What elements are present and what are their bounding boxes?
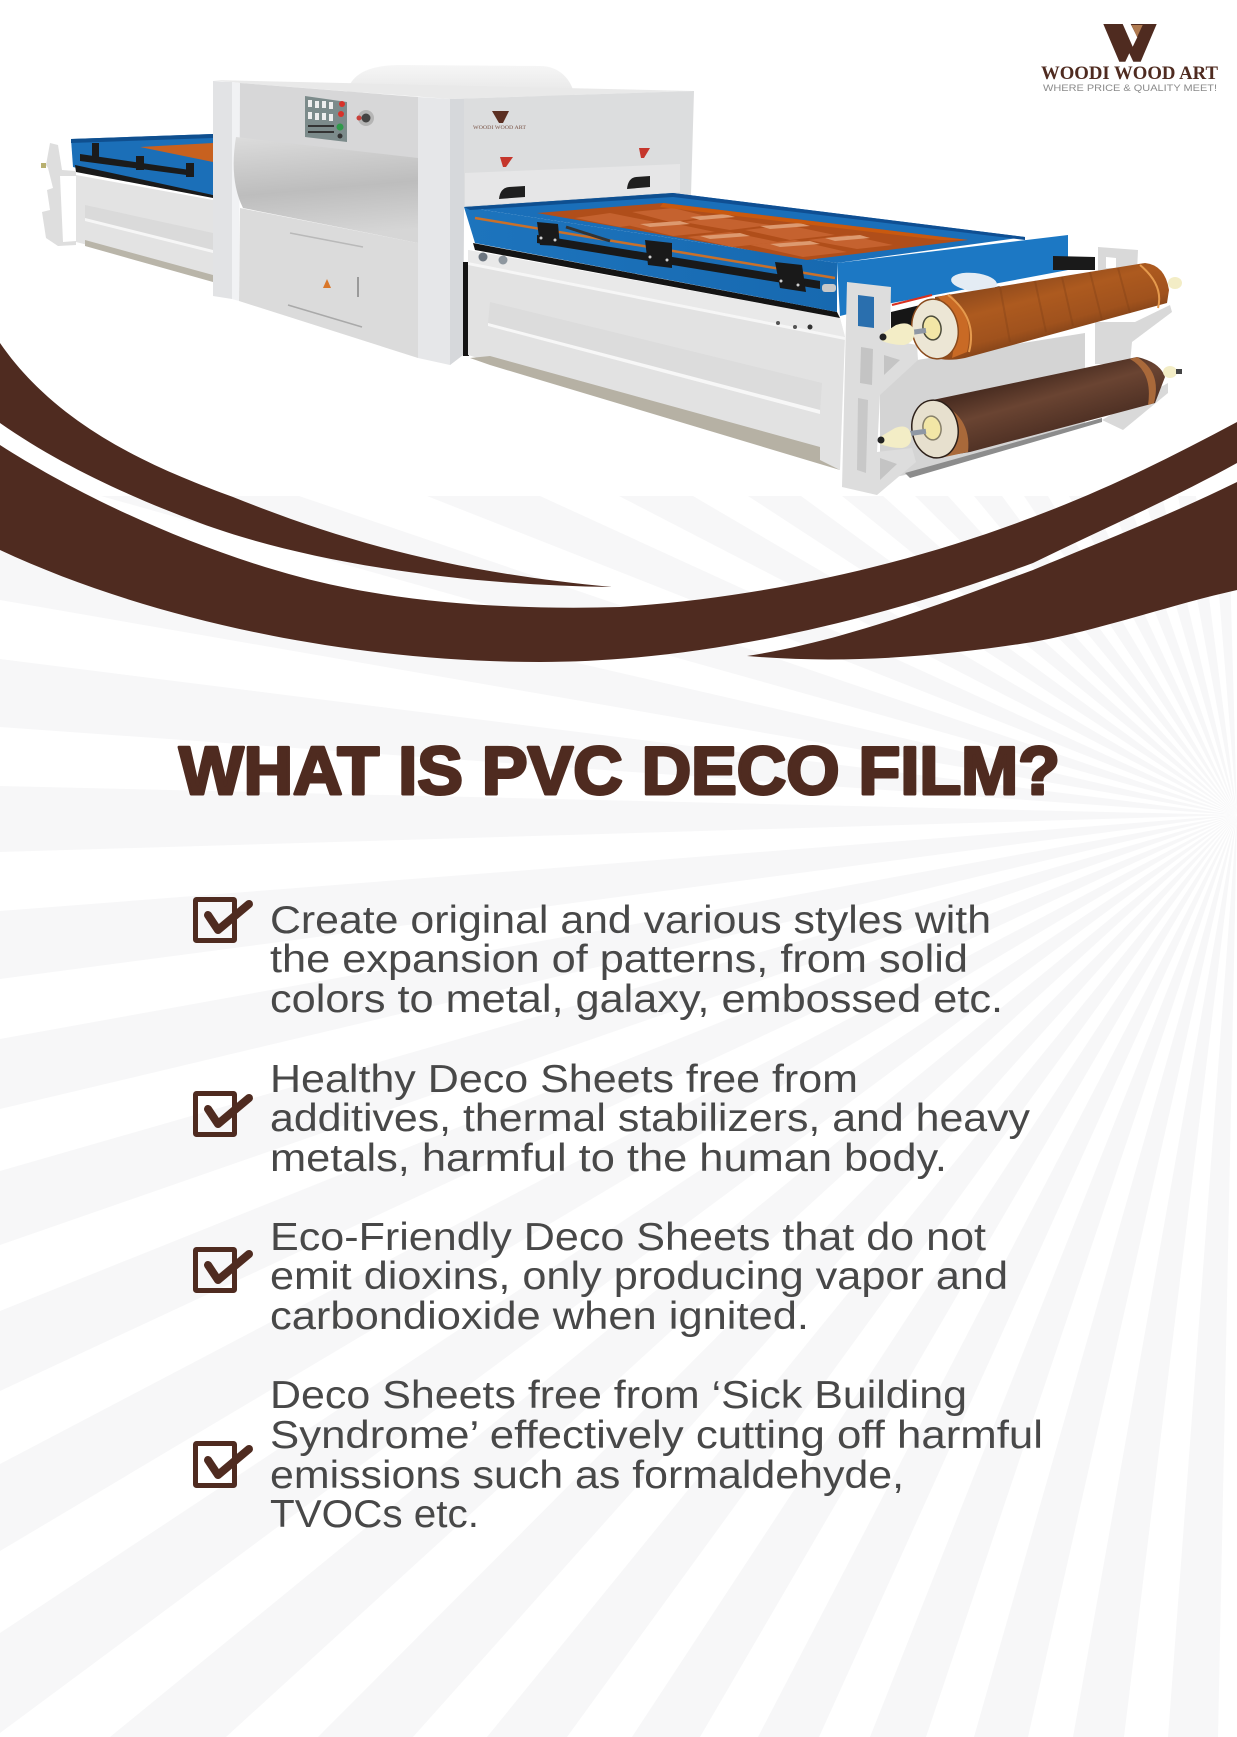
text block: Deco Sheets free from ‘Sick Building [270,1374,967,1417]
text block [270,899,1003,1021]
selector knob [356,110,374,126]
icon: checkbox [196,1250,249,1290]
film bed [537,203,968,260]
text block: Create original and various styles with [270,899,991,942]
text block: colors to metal, galaxy, embossed etc. [270,978,1003,1021]
top dome [347,65,575,97]
logo tagline: WHERE PRICE & QUALITY MEET! [1043,83,1217,93]
right blue table with film bed [464,193,1068,318]
upper left swoosh [0,343,612,587]
machine logo: WOODI WOOD ART [473,126,526,131]
pump motor [950,271,998,293]
text block: TVOCs etc. [270,1493,479,1536]
logo mark [1103,24,1157,62]
text block: emit dioxins, only producing vapor and [270,1255,1008,1298]
right lower body [463,250,845,470]
left table [41,134,213,282]
text block: Eco-Friendly Deco Sheets that do not [270,1216,986,1259]
title: WHAT IS PVC DECO FILM? [179,733,1060,809]
text block: carbondioxide when ignited. [270,1295,809,1338]
text block [270,1216,1008,1338]
machine logo [473,111,526,131]
air cylinder [1053,256,1095,270]
bullet 2 [196,1058,1031,1180]
central cabinet [213,65,694,365]
logo wordmark: WOODI WOOD ART [1041,63,1218,84]
bullet 4 [196,1374,1043,1536]
back bracket [1095,247,1172,430]
logo [1041,24,1218,93]
back wall behind rollers [880,333,1085,480]
black gap and wire [891,286,1000,340]
text block: additives, thermal stabilizers, and heavy [270,1097,1031,1140]
main swoosh [0,422,1237,662]
text block: metals, harmful to the human body. [270,1137,947,1180]
lower film roller [878,357,1182,462]
lower right swoosh [747,482,1237,659]
silver curved panel [234,137,418,243]
bullet 1 [196,899,1003,1021]
text block [270,1058,1031,1180]
product image: vacuum membrane press machine [41,65,1182,495]
top film roller [880,263,1182,363]
text block: Syndrome’ effectively cutting off harmful [270,1414,1043,1457]
text block: Healthy Deco Sheets free from [270,1058,858,1101]
text block [270,1374,1043,1536]
front bracket [842,282,918,495]
text block: emissions such as formaldehyde, [270,1454,904,1497]
icon: checkbox [196,900,249,940]
control panel [305,96,347,142]
brown swooshes [0,343,1237,662]
clamp rail [537,222,820,292]
text block: the expansion of patterns, from solid [270,938,968,981]
icon: checkbox [196,1444,249,1486]
bullet 3 [196,1216,1008,1338]
icon: checkbox [196,1094,249,1134]
